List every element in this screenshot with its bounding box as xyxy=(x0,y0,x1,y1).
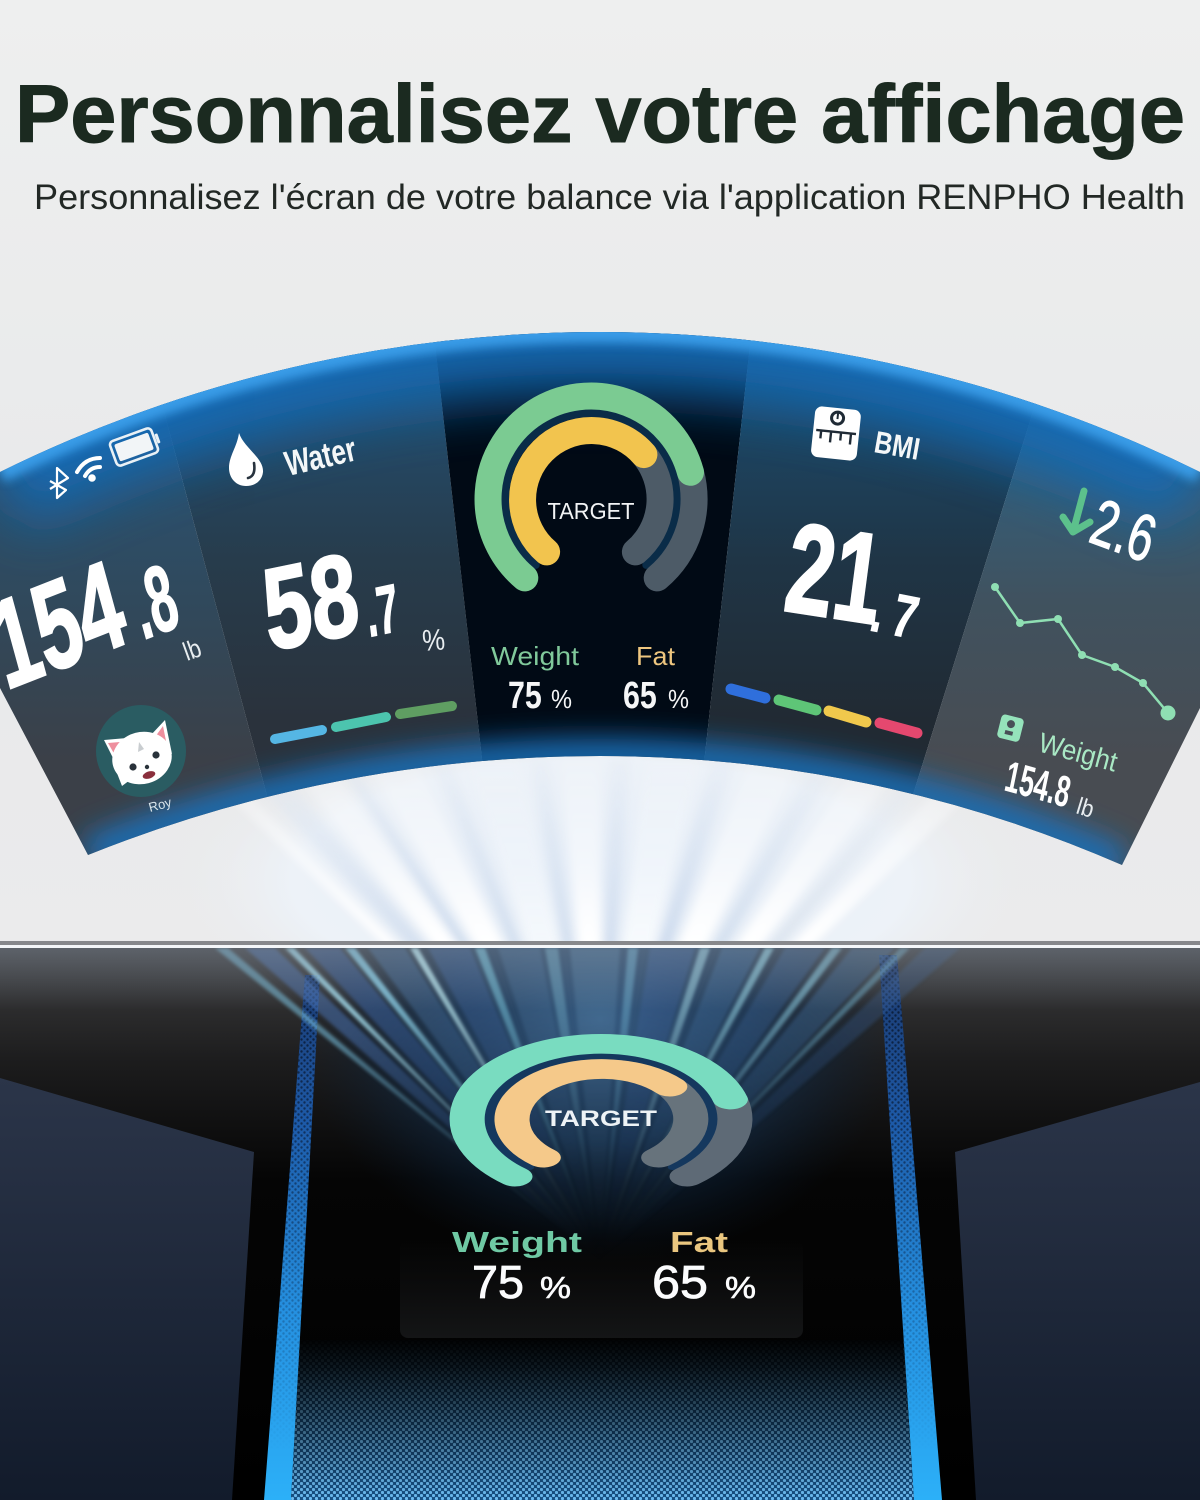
unit: fat percent: % xyxy=(668,684,689,714)
display value: fat percent: 65 xyxy=(652,1256,708,1308)
BMI decimals: .7 xyxy=(865,579,933,654)
background: light upper wall xyxy=(0,0,1200,945)
light rays above the scale xyxy=(260,756,938,941)
icon: small scale xyxy=(996,714,1025,743)
light rays on the display xyxy=(216,948,957,1204)
BMI scale bars xyxy=(731,689,917,733)
unit: weight percent: % xyxy=(551,684,572,714)
gauge label: TARGET xyxy=(548,498,634,524)
water scale bars xyxy=(275,706,452,739)
right navy foot panel xyxy=(955,1082,1200,1500)
haze at the top of the display xyxy=(0,948,1200,1010)
halftone floor of the display xyxy=(291,1340,914,1500)
panel: target gauge xyxy=(488,396,694,717)
avatar: cat xyxy=(96,705,186,797)
display gauge xyxy=(467,1044,735,1177)
display unit: weight percent: % xyxy=(540,1270,571,1305)
trend value: 2.6 xyxy=(1082,486,1164,577)
curved display band xyxy=(0,332,1200,865)
right blue strip xyxy=(879,955,942,1500)
icon: bluetooth xyxy=(50,468,68,498)
scale body: dark surface xyxy=(0,948,1200,1500)
scale display xyxy=(452,1044,756,1308)
value: fat percent: 65 xyxy=(623,675,657,717)
display label: fat: Fat xyxy=(670,1227,728,1259)
label: water: Water xyxy=(281,429,360,484)
water decimals: .7 xyxy=(362,569,403,652)
BMI value: 21 xyxy=(778,497,891,652)
subtitle: Personnalisez l'écran de votre balance via l'application RENPHO Health xyxy=(34,178,1185,217)
label: weight: Weight xyxy=(1035,727,1121,778)
water value: 58 xyxy=(256,528,365,676)
water unit: % xyxy=(421,623,446,657)
left navy foot panel xyxy=(0,1078,254,1500)
panel: water xyxy=(229,429,452,739)
gauge xyxy=(488,396,694,578)
line chart xyxy=(991,583,1176,720)
label: fat: Fat xyxy=(636,641,676,671)
label: weight: Weight xyxy=(491,641,580,671)
panel: BMI xyxy=(731,406,933,733)
label: BMI: BMI xyxy=(872,425,923,466)
blue glow behind display xyxy=(350,948,851,1242)
left blue strip xyxy=(264,975,320,1500)
icon: down arrow xyxy=(1063,491,1090,532)
panel: weight xyxy=(0,426,205,815)
display gauge label: TARGET xyxy=(545,1106,658,1131)
weight reading unit: lb xyxy=(1073,792,1098,823)
display label: weight: Weight xyxy=(452,1227,582,1259)
panel: weight trend xyxy=(991,486,1176,823)
weight reading: 154.8 xyxy=(1001,751,1075,817)
icon: battery xyxy=(109,426,163,467)
display unit: fat percent: % xyxy=(725,1270,756,1305)
icon: water drop xyxy=(229,433,263,486)
value: weight percent: 75 xyxy=(508,675,542,717)
title: Personnalisez votre affichage xyxy=(15,69,1185,160)
icon: wifi xyxy=(77,458,100,480)
scale edge line xyxy=(0,941,1200,948)
display lower plate xyxy=(400,1240,803,1338)
avatar name: Roy xyxy=(147,794,174,815)
weight decimals: .8 xyxy=(121,543,188,659)
display value: weight percent: 75 xyxy=(472,1256,524,1308)
weight unit: lb xyxy=(179,634,205,667)
icon: scale xyxy=(810,406,861,461)
